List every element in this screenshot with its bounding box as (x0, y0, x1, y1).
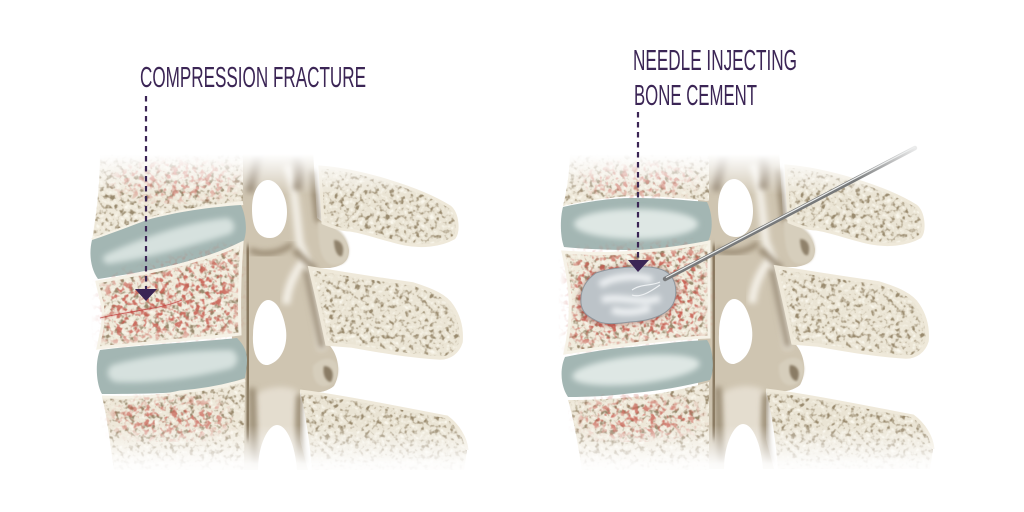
upper intervertebral disc (561, 198, 712, 250)
lower intervertebral disc (97, 338, 247, 394)
label: needle injecting bone cement: BONE CEMENT (634, 80, 757, 112)
top fade (80, 125, 480, 195)
posterior spine elements and spinous processes (698, 149, 933, 469)
bottom fade (80, 425, 480, 480)
right arrow: needle callout (628, 112, 649, 272)
fractured vertebral body (97, 243, 242, 348)
upper vertebral body (563, 150, 709, 206)
label: compression fracture: COMPRESSION FRACTURE (140, 62, 366, 94)
lower vertebral body (102, 380, 245, 470)
upper intervertebral disc (90, 205, 246, 279)
label: needle injecting bone cement: NEEDLE INJECTING (633, 45, 797, 77)
needle (665, 147, 915, 279)
treated vertebral body (563, 242, 709, 353)
panel: bone cement injection spine illustration (550, 125, 950, 480)
lower intervertebral disc (562, 340, 713, 397)
fracture line (100, 300, 182, 318)
bottom fade (550, 425, 950, 480)
top fade (550, 125, 950, 195)
posterior spine elements and spinous processes (232, 150, 467, 470)
left arrow: compression fracture callout (135, 96, 157, 301)
bone cement mass (580, 267, 677, 325)
label: needle injecting bone cement (633, 45, 797, 112)
panel: compression fracture spine illustration (80, 125, 480, 480)
lower vertebral body (568, 382, 709, 470)
upper vertebral body (92, 150, 243, 241)
